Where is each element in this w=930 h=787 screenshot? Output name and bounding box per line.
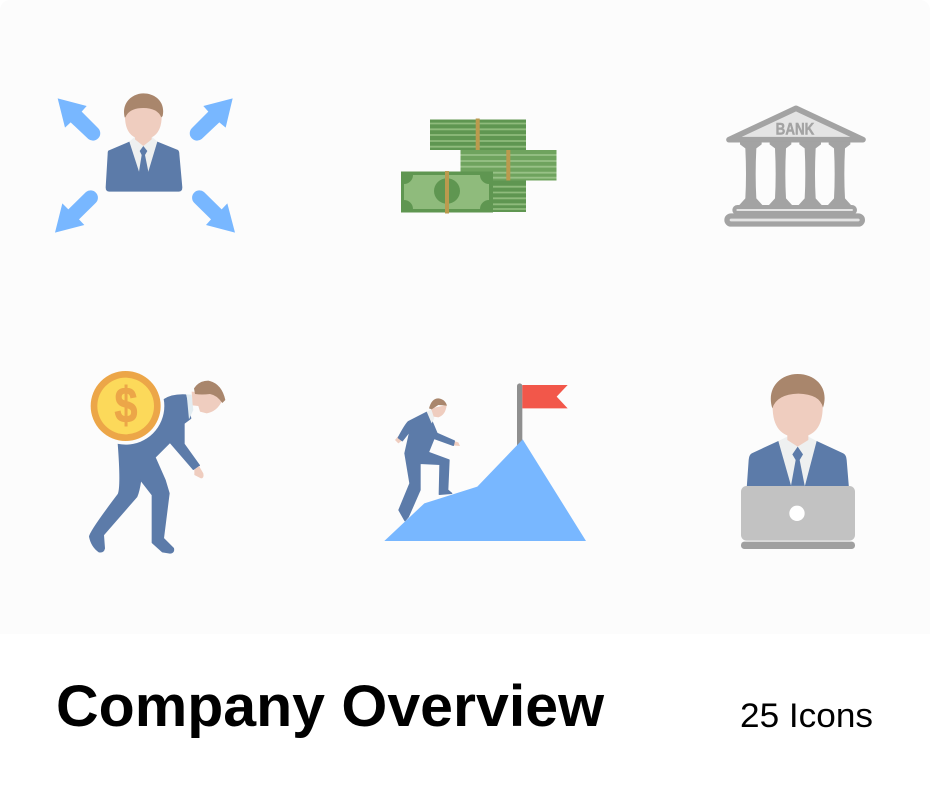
icon: man carrying coin: [87, 367, 225, 553]
icon: man climbing mountain with flag: [384, 383, 586, 541]
bill stack lower: [492, 180, 526, 212]
paper bands: [476, 118, 510, 180]
dollar sign: $: [115, 378, 137, 434]
front banknote: [401, 171, 493, 214]
icon: businessman at laptop: [741, 374, 855, 549]
icon: bank building: [727, 108, 863, 224]
icon: stacks of money: [401, 118, 556, 214]
icon: businessman with four arrows: [55, 93, 235, 233]
title: Company Overview: [56, 674, 605, 739]
bill stack middle: [460, 150, 556, 180]
laptop: [741, 486, 855, 549]
icon count: 25 Icons: [740, 697, 873, 735]
bank label: BANK: [776, 120, 814, 139]
bill stack top: [430, 120, 526, 150]
